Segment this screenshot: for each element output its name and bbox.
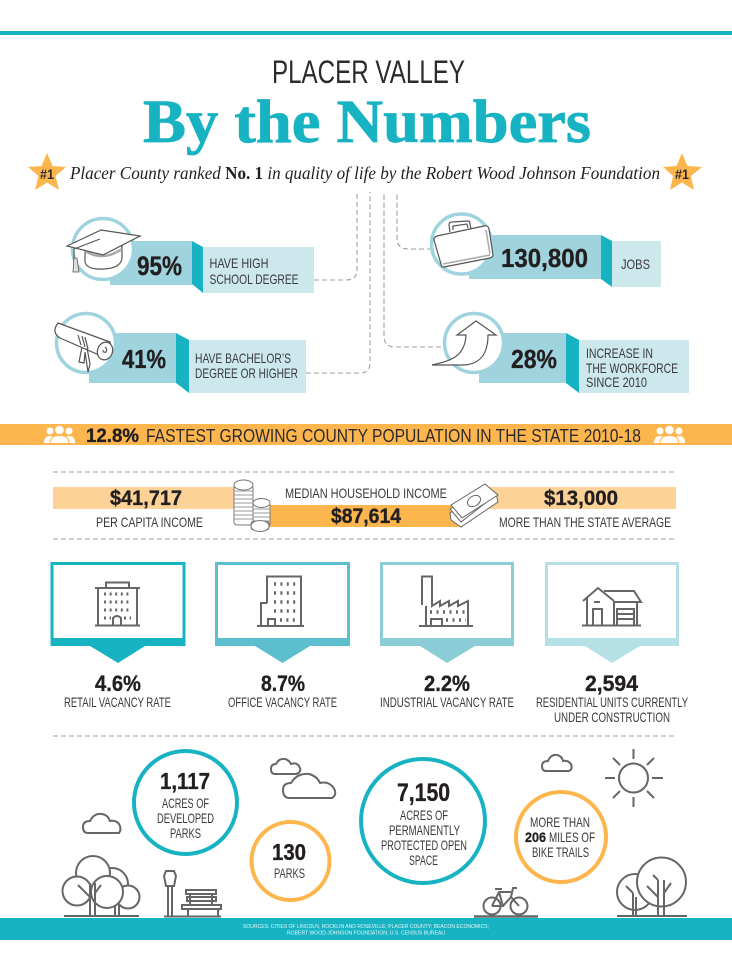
population banner: FASTEST GROWING COUNTY POPULATION IN THE STATE 2010-18 xyxy=(146,425,641,446)
badge: left star xyxy=(28,153,66,190)
icon: cloud right xyxy=(542,755,572,771)
title: By the Numbers xyxy=(143,89,591,156)
stat: workforce increase: SINCE 2010 xyxy=(586,374,647,390)
per capita income xyxy=(96,487,203,530)
icon: cloud left xyxy=(83,814,120,833)
stat: workforce increase: THE WORKFORCE xyxy=(586,360,678,376)
icon: park trees right xyxy=(617,858,687,916)
title: PLACER VALLEY xyxy=(272,54,465,90)
icon: cloud small top xyxy=(271,759,300,774)
icon: park trees left xyxy=(62,856,140,916)
circle: developed parks: DEVELOPED xyxy=(157,810,214,826)
panel: retail vacancy: RETAIL VACANCY RATE xyxy=(64,694,171,710)
tagline: Placer County ranked No. 1 in quality of life by the Robert Wood Johnson Foundation xyxy=(69,163,660,183)
circle: bike trails xyxy=(516,792,606,882)
stat: workforce increase: 28% xyxy=(511,344,557,374)
panel: retail vacancy: 4.6% xyxy=(95,671,141,696)
circle: developed parks: PARKS xyxy=(170,825,201,841)
top rule xyxy=(0,31,732,35)
stat: jobs: 130,800 xyxy=(501,243,588,273)
connector lines xyxy=(306,192,441,373)
circle: developed parks: 1,117 xyxy=(160,768,210,794)
stat: jobs xyxy=(432,214,661,287)
icon: sun xyxy=(605,749,663,807)
circle: bike trails: MORE THAN xyxy=(530,814,590,830)
income section xyxy=(53,472,676,736)
panel: industrial vacancy: INDUSTRIAL VACANCY RATE xyxy=(380,694,514,710)
stat: high school degree xyxy=(67,218,314,293)
icon: people right xyxy=(654,425,685,444)
circle: protected open space: ACRES OF xyxy=(400,807,448,823)
icon: people left xyxy=(44,425,75,444)
stat: bachelor's degree xyxy=(55,314,306,393)
badge: right star xyxy=(663,153,702,190)
per capita income: $41,717 xyxy=(110,487,182,510)
icon: up arrow xyxy=(432,321,496,365)
circle: parks: PARKS xyxy=(274,865,305,881)
panel: office vacancy: 8.7% xyxy=(261,671,305,696)
panel: residential units: 2,594 xyxy=(585,671,639,696)
more than state average: MORE THAN THE STATE AVERAGE xyxy=(499,514,671,530)
median household income: $87,614 xyxy=(331,505,401,528)
stat: jobs: JOBS xyxy=(621,256,650,272)
panel: residential units: UNDER CONSTRUCTION xyxy=(554,709,670,725)
footer sources: ROBERT WOOD JOHNSON FOUNDATION; U.S. CENSUS BUREAU xyxy=(287,930,445,936)
circle: parks xyxy=(252,822,330,900)
stat: high school degree: SCHOOL DEGREE xyxy=(210,271,298,287)
icon: briefcase xyxy=(434,221,493,267)
icon: office tower xyxy=(257,576,304,626)
more than state average xyxy=(499,487,671,530)
stat: high school degree: HAVE HIGH xyxy=(210,255,268,271)
circle: protected open space: PERMANENTLY xyxy=(389,822,460,838)
icon: diploma xyxy=(55,323,115,372)
title xyxy=(143,54,591,156)
icon: graduation cap xyxy=(67,230,140,272)
footer sources: SOURCES: CITIES OF LINCOLN, ROCKLIN AND ROSEVILLE; PLACER COUNTY; BEACON ECONOMICS; xyxy=(243,924,489,930)
stat: bachelor's degree: DEGREE OR HIGHER xyxy=(195,365,298,381)
icon: cloud large xyxy=(283,774,335,798)
panel: office vacancy xyxy=(215,564,350,710)
population banner: 12.8% xyxy=(86,426,139,447)
circle: protected open space xyxy=(361,759,485,883)
circle: developed parks: ACRES OF xyxy=(162,795,209,811)
icon: bicycle xyxy=(474,888,538,916)
stat: bachelor's degree: HAVE BACHELOR’S xyxy=(195,350,291,366)
badge: left star: #1 xyxy=(40,166,54,182)
icon: money stack xyxy=(450,484,498,527)
icon: coins xyxy=(234,480,270,532)
footer sources xyxy=(0,918,732,940)
icon: house xyxy=(582,588,641,626)
circle: bike trails: 206 xyxy=(525,829,546,845)
per capita income: PER CAPITA INCOME xyxy=(96,514,203,530)
panel: residential units xyxy=(536,564,688,725)
panel: retail vacancy xyxy=(51,564,185,710)
circle: developed parks xyxy=(134,751,237,854)
circle: protected open space: SPACE xyxy=(409,852,438,868)
panel: office vacancy: OFFICE VACANCY RATE xyxy=(228,694,337,710)
median household income xyxy=(285,485,447,528)
icon: lamp and bench xyxy=(164,871,221,916)
icon: factory xyxy=(419,576,473,626)
stat: workforce increase xyxy=(432,314,689,393)
badge: right star: #1 xyxy=(675,166,689,182)
median household income: MEDIAN HOUSEHOLD INCOME xyxy=(285,485,447,501)
circle: parks: 130 xyxy=(272,839,306,865)
circle: bike trails: MILES OF xyxy=(549,829,595,845)
more than state average: $13,000 xyxy=(544,487,618,510)
stat: bachelor's degree: 41% xyxy=(122,344,166,374)
circle: bike trails: BIKE TRAILS xyxy=(532,844,589,860)
circle: protected open space: 7,150 xyxy=(397,779,450,807)
icon: retail building xyxy=(95,582,140,626)
panel: industrial vacancy: 2.2% xyxy=(424,671,470,696)
stat: workforce increase: INCREASE IN xyxy=(586,345,653,361)
circle: protected open space: PROTECTED OPEN xyxy=(381,837,467,853)
panel: industrial vacancy xyxy=(380,564,514,710)
stat: high school degree: 95% xyxy=(137,251,182,281)
